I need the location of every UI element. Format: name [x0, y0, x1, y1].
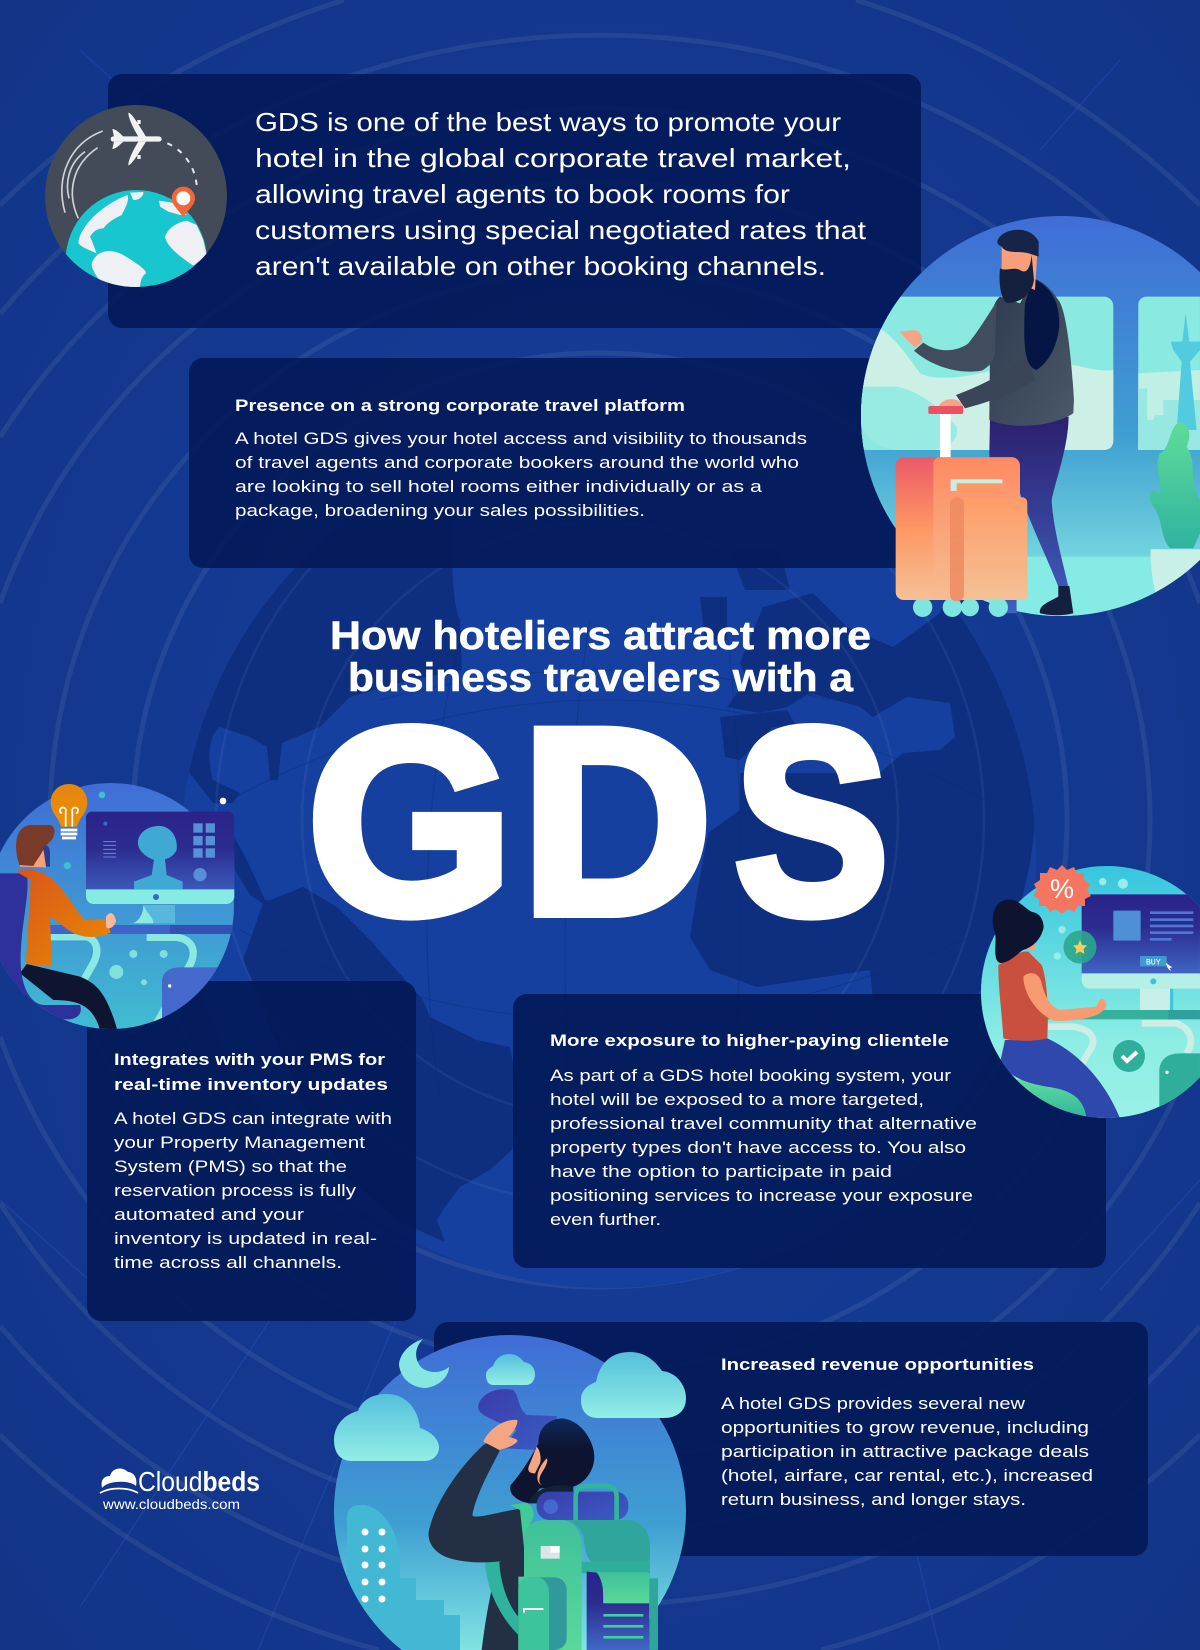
person — [0, 825, 117, 1030]
body: revenue: (hotel, airfare, car rental, etc.), increased — [721, 1466, 1093, 1485]
man — [900, 230, 1074, 615]
body: integrates: inventory is updated in real- — [114, 1229, 377, 1248]
body: exposure: positioning services to increase your exposure — [550, 1186, 973, 1205]
heading: presence: Presence on a strong corporate travel platform — [235, 396, 685, 415]
panel: presence on a strong corporate travel platform — [189, 358, 929, 568]
body: exposure: hotel will be exposed to a more targeted, — [550, 1090, 924, 1109]
panel: more exposure — [513, 994, 1106, 1268]
body: revenue: return business, and longer stays. — [721, 1490, 1026, 1509]
binoculars — [478, 1389, 557, 1450]
plant and pot — [1150, 422, 1200, 592]
illustration: woman booking online: BUY — [1146, 957, 1161, 967]
check badge — [1113, 1040, 1145, 1072]
woman hair — [993, 899, 1044, 963]
discount badge: % — [1050, 874, 1074, 904]
clouds — [334, 1352, 686, 1461]
body: integrates: System (PMS) so that the — [114, 1157, 347, 1176]
South America — [243, 887, 520, 1242]
torso and arm — [482, 1555, 525, 1650]
body: integrates: your Property Management — [114, 1133, 365, 1152]
building windows — [362, 1528, 386, 1602]
body: presence — [235, 429, 807, 520]
illustration: traveler with suitcase — [860, 216, 1200, 620]
body: presence: package, broadening your sales possibilities. — [235, 501, 645, 520]
moon — [399, 1339, 449, 1388]
illustration: backpacker with binoculars — [334, 1335, 686, 1650]
body: revenue — [721, 1394, 1093, 1509]
panel: increased revenue — [434, 1322, 1148, 1556]
Africa and Asia — [690, 573, 1035, 1000]
body: integrates: time across all channels. — [114, 1253, 342, 1272]
intro text — [255, 107, 867, 281]
body: revenue: opportunities to grow revenue, including — [721, 1418, 1089, 1437]
Central America — [234, 838, 268, 904]
body: exposure: As part of a GDS hotel booking system, your — [550, 1066, 951, 1085]
logo: Cloudbeds — [100, 1466, 260, 1512]
body: presence: are looking to sell hotel rooms either individually or as a — [235, 477, 763, 496]
body: exposure: have the option to participate in paid — [550, 1162, 892, 1181]
big GDS heading: G — [307, 674, 513, 970]
intro text: aren't available on other booking channels. — [255, 251, 826, 281]
icon: globe with plane and pin — [45, 105, 227, 287]
body: presence: of travel agents and corporate bookers around the world who — [235, 453, 799, 472]
woman — [998, 942, 1120, 1118]
heading: revenue: Increased revenue opportunities — [721, 1355, 1034, 1374]
panel: intro — [108, 74, 921, 328]
plane — [111, 113, 162, 165]
intro text: customers using special negotiated rates that — [255, 215, 867, 245]
star badge — [1064, 930, 1096, 964]
body: integrates: A hotel GDS can integrate with — [114, 1109, 392, 1128]
body: integrates: reservation process is fully — [114, 1181, 357, 1200]
location pin — [172, 187, 195, 217]
monitor — [86, 812, 234, 904]
illustration: person at desk with video call — [0, 783, 234, 1030]
title: How hoteliers attract more — [330, 614, 871, 658]
discount badge — [1033, 865, 1091, 914]
body: integrates: automated and your — [114, 1205, 304, 1224]
North America — [189, 568, 462, 803]
logo: Cloudbeds: www.cloudbeds.com — [102, 1497, 240, 1512]
world map — [184, 568, 1036, 1288]
body: exposure: professional travel community that alternative — [550, 1114, 977, 1133]
bedroll — [537, 1492, 628, 1520]
body: integrates — [114, 1109, 392, 1272]
heading: integrates: Integrates with your PMS for — [114, 1050, 385, 1069]
head — [510, 1418, 594, 1503]
body: exposure — [550, 1066, 977, 1229]
body: exposure: property types don't have access to. You also — [550, 1138, 966, 1157]
logo: Cloudbeds: Cloudbeds — [138, 1466, 260, 1497]
heading: integrates — [114, 1050, 388, 1094]
intro text: hotel in the global corporate travel market, — [255, 143, 851, 173]
panel: integrates with PMS — [87, 981, 416, 1321]
body: revenue: participation in attractive package deals — [721, 1442, 1089, 1461]
intro text: allowing travel agents to book rooms for — [255, 179, 790, 209]
Europe — [727, 593, 907, 717]
suitcase — [896, 406, 1027, 617]
illustration: woman booking online — [981, 865, 1200, 1120]
icon: light bulb — [51, 784, 226, 838]
backpack — [518, 1520, 582, 1650]
heading: exposure: More exposure to higher-paying clientele — [550, 1031, 949, 1050]
body: presence: A hotel GDS gives your hotel access and visibility to thousands — [235, 429, 807, 448]
big GDS heading: D — [521, 674, 712, 970]
body: revenue: A hotel GDS provides several new — [721, 1394, 1026, 1413]
title — [330, 614, 871, 700]
intro text: GDS is one of the best ways to promote your — [255, 107, 841, 137]
big GDS heading: S — [734, 674, 889, 970]
backpacker — [429, 1389, 658, 1650]
body: exposure: even further. — [550, 1210, 661, 1229]
title: business travelers with a — [348, 656, 854, 700]
heading: integrates: real-time inventory updates — [114, 1075, 388, 1094]
